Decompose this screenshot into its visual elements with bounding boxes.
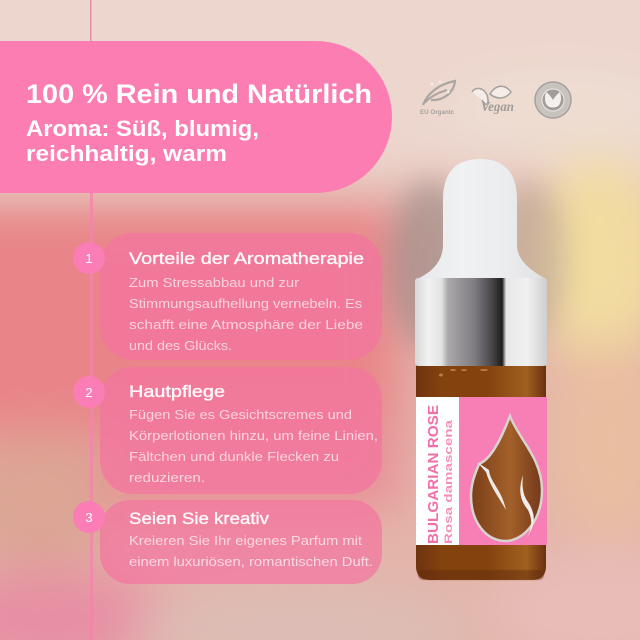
panel: card 2 skin care — [73, 367, 382, 494]
text: card 1 body: und des Glücks. — [129, 338, 232, 353]
text: card 3 body: einem luxuriösen, romantischen Duft. — [129, 554, 373, 569]
subheading: aroma description — [26, 116, 259, 166]
number badge 1 — [73, 242, 105, 274]
icons: certification badges — [420, 80, 571, 118]
label text: BULGARIAN ROSE — [425, 405, 442, 544]
number badge 3 — [73, 501, 105, 533]
text: card 1 body — [129, 275, 363, 353]
product: dropper bottle — [415, 159, 547, 580]
icon: rose oil drop — [471, 416, 542, 541]
icon: vegan leaf — [472, 86, 514, 115]
panel: header banner — [0, 41, 392, 193]
text: card 2 body: reduzieren. — [129, 470, 205, 485]
icon: EU organic leaf: EU Organic — [420, 110, 455, 116]
text: card 2 body: Körperlotionen hinzu, um feine Linien, — [129, 428, 378, 443]
subheading: aroma description: reichhaltig, warm — [26, 141, 227, 166]
label text: Rosa damascena — [443, 419, 455, 544]
text: card 1 body: Zum Stressabbau und zur — [129, 275, 300, 290]
text: card 2 body — [129, 407, 378, 485]
text: card 2 body: Fältchen und dunkle Flecken zu — [129, 449, 339, 464]
text: card 3 body — [129, 533, 373, 569]
number badge 3: 3 — [85, 510, 93, 525]
label — [416, 397, 547, 545]
title: card 3: Seien Sie kreativ — [129, 509, 270, 528]
dropper bulb — [417, 159, 546, 279]
bottle glass — [416, 364, 546, 580]
title: card 1: Vorteile der Aromatherapie — [129, 249, 364, 268]
text: card 1 body: schafft eine Atmosphäre der Liebe — [129, 317, 363, 332]
text: card 3 body: Kreieren Sie Ihr eigenes Parfum mit — [129, 533, 362, 548]
title: card 2: Hautpflege — [129, 382, 225, 401]
heading: product claim: 100 % Rein und Natürlich — [26, 79, 372, 109]
number badge 2 — [73, 376, 105, 408]
vertical decorative line — [90, 0, 93, 640]
icon: no animal testing — [535, 82, 571, 118]
text: card 2 body: Fügen Sie es Gesichtscremes und — [129, 407, 352, 422]
silver collar — [415, 278, 547, 366]
panel: card 3 creative — [73, 500, 382, 584]
panel: card 1 aromatherapy — [73, 233, 382, 360]
icon: vegan leaf: Vegan — [481, 100, 514, 115]
text: card 1 body: Stimmungsaufhellung vernebeln. Es — [129, 296, 363, 311]
label text — [425, 405, 455, 544]
number badge 2: 2 — [85, 385, 93, 400]
icon: EU organic leaf — [420, 80, 455, 116]
subheading: aroma description: Aroma: Süß, blumig, — [26, 116, 259, 141]
number badge 1: 1 — [85, 251, 93, 266]
